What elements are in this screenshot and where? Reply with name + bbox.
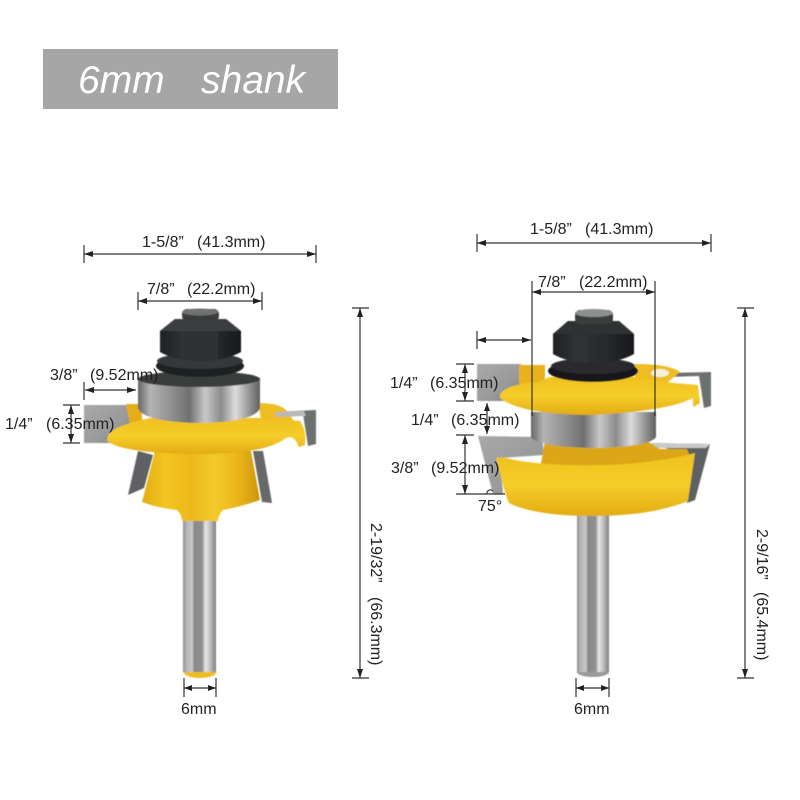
right dimensions — [390, 221, 770, 718]
dimension: right overall width: (41.3mm) — [585, 221, 653, 238]
dimension: right upper cutter height: 1/4” — [390, 375, 418, 392]
dimension: left cutter height: 1/4” — [5, 416, 33, 433]
dimension: left rabbet depth — [50, 367, 158, 400]
left cutter blades — [84, 405, 316, 446]
dimension: left rabbet depth: 3/8” — [50, 367, 78, 384]
dimension: right lower cutter height: (9.52mm) — [431, 460, 499, 477]
left upper yellow flange — [107, 403, 306, 454]
right shank — [577, 512, 609, 677]
dimension: right overall width — [477, 221, 711, 252]
dimension: right gap height: (6.35mm) — [451, 412, 519, 429]
left lower gray blades — [128, 451, 272, 503]
dimension: left cutter height — [5, 405, 114, 443]
dimension: right overall length — [737, 308, 770, 678]
left washer — [156, 353, 244, 377]
left hex nut — [160, 319, 241, 361]
left bearing — [138, 371, 260, 423]
angle label: 75° — [478, 498, 502, 515]
dimension: left overall width: (41.3mm) — [197, 234, 265, 251]
left dimensions — [5, 234, 384, 718]
dimension: left overall width: 1-5/8” — [142, 234, 184, 251]
dimension: right upper cutter height — [390, 364, 498, 401]
dimension: left shank diameter — [181, 678, 217, 718]
right hex nut — [553, 321, 634, 363]
title banner: shank — [201, 59, 308, 102]
left lower yellow cone — [142, 451, 260, 521]
right washer — [548, 358, 638, 382]
dimension: left shank diameter: 6mm — [181, 701, 217, 718]
right upper cutters — [477, 364, 711, 408]
dimension: right bearing width: (22.2mm) — [579, 274, 647, 291]
dimension: right shank diameter: 6mm — [574, 701, 610, 718]
left arbor pin — [182, 308, 219, 321]
left router bit — [84, 308, 316, 678]
right lower yellow flange — [496, 440, 695, 516]
dimension: right bearing width — [532, 274, 655, 416]
dimension: left overall length: 2-19/32” — [367, 523, 384, 583]
right upper yellow flange — [500, 364, 700, 415]
dimension: right lower cutter height: 3/8” — [391, 460, 419, 477]
dimension: right gap height — [411, 403, 519, 434]
right lower cutters — [478, 436, 710, 503]
dimension: right overall width: 1-5/8” — [530, 221, 572, 238]
dimension: right overall length: (65.4mm) — [753, 592, 770, 660]
dimension: right upper cutter height: (6.35mm) — [430, 375, 498, 392]
dimension: right gap height: 1/4” — [411, 412, 439, 429]
title banner: 6mm — [78, 59, 165, 102]
left shank — [183, 515, 216, 678]
dimension: left overall length — [352, 308, 384, 678]
dimension: right shank diameter — [574, 678, 610, 718]
angle label — [478, 490, 502, 515]
title banner — [43, 49, 338, 109]
dimension: left bearing width — [138, 281, 262, 310]
dimension: left bearing width: (22.2mm) — [187, 281, 255, 298]
dimension: left overall width — [84, 234, 316, 263]
dimension: right rabbet depth — [477, 331, 531, 349]
dimension: left bearing width: 7/8” — [147, 281, 175, 298]
right router bit — [477, 309, 711, 677]
dimension: left overall length: (66.3mm) — [367, 597, 384, 665]
right arbor pin — [575, 309, 613, 324]
dimension: right bearing width: 7/8” — [538, 274, 566, 291]
dimension: right lower cutter height — [391, 435, 505, 494]
dimension: left cutter height: (6.35mm) — [46, 416, 114, 433]
dimension: right overall length: 2-9/16” — [753, 529, 770, 580]
right bearing — [531, 412, 656, 448]
dimension: left rabbet depth: (9.52mm) — [90, 367, 158, 384]
